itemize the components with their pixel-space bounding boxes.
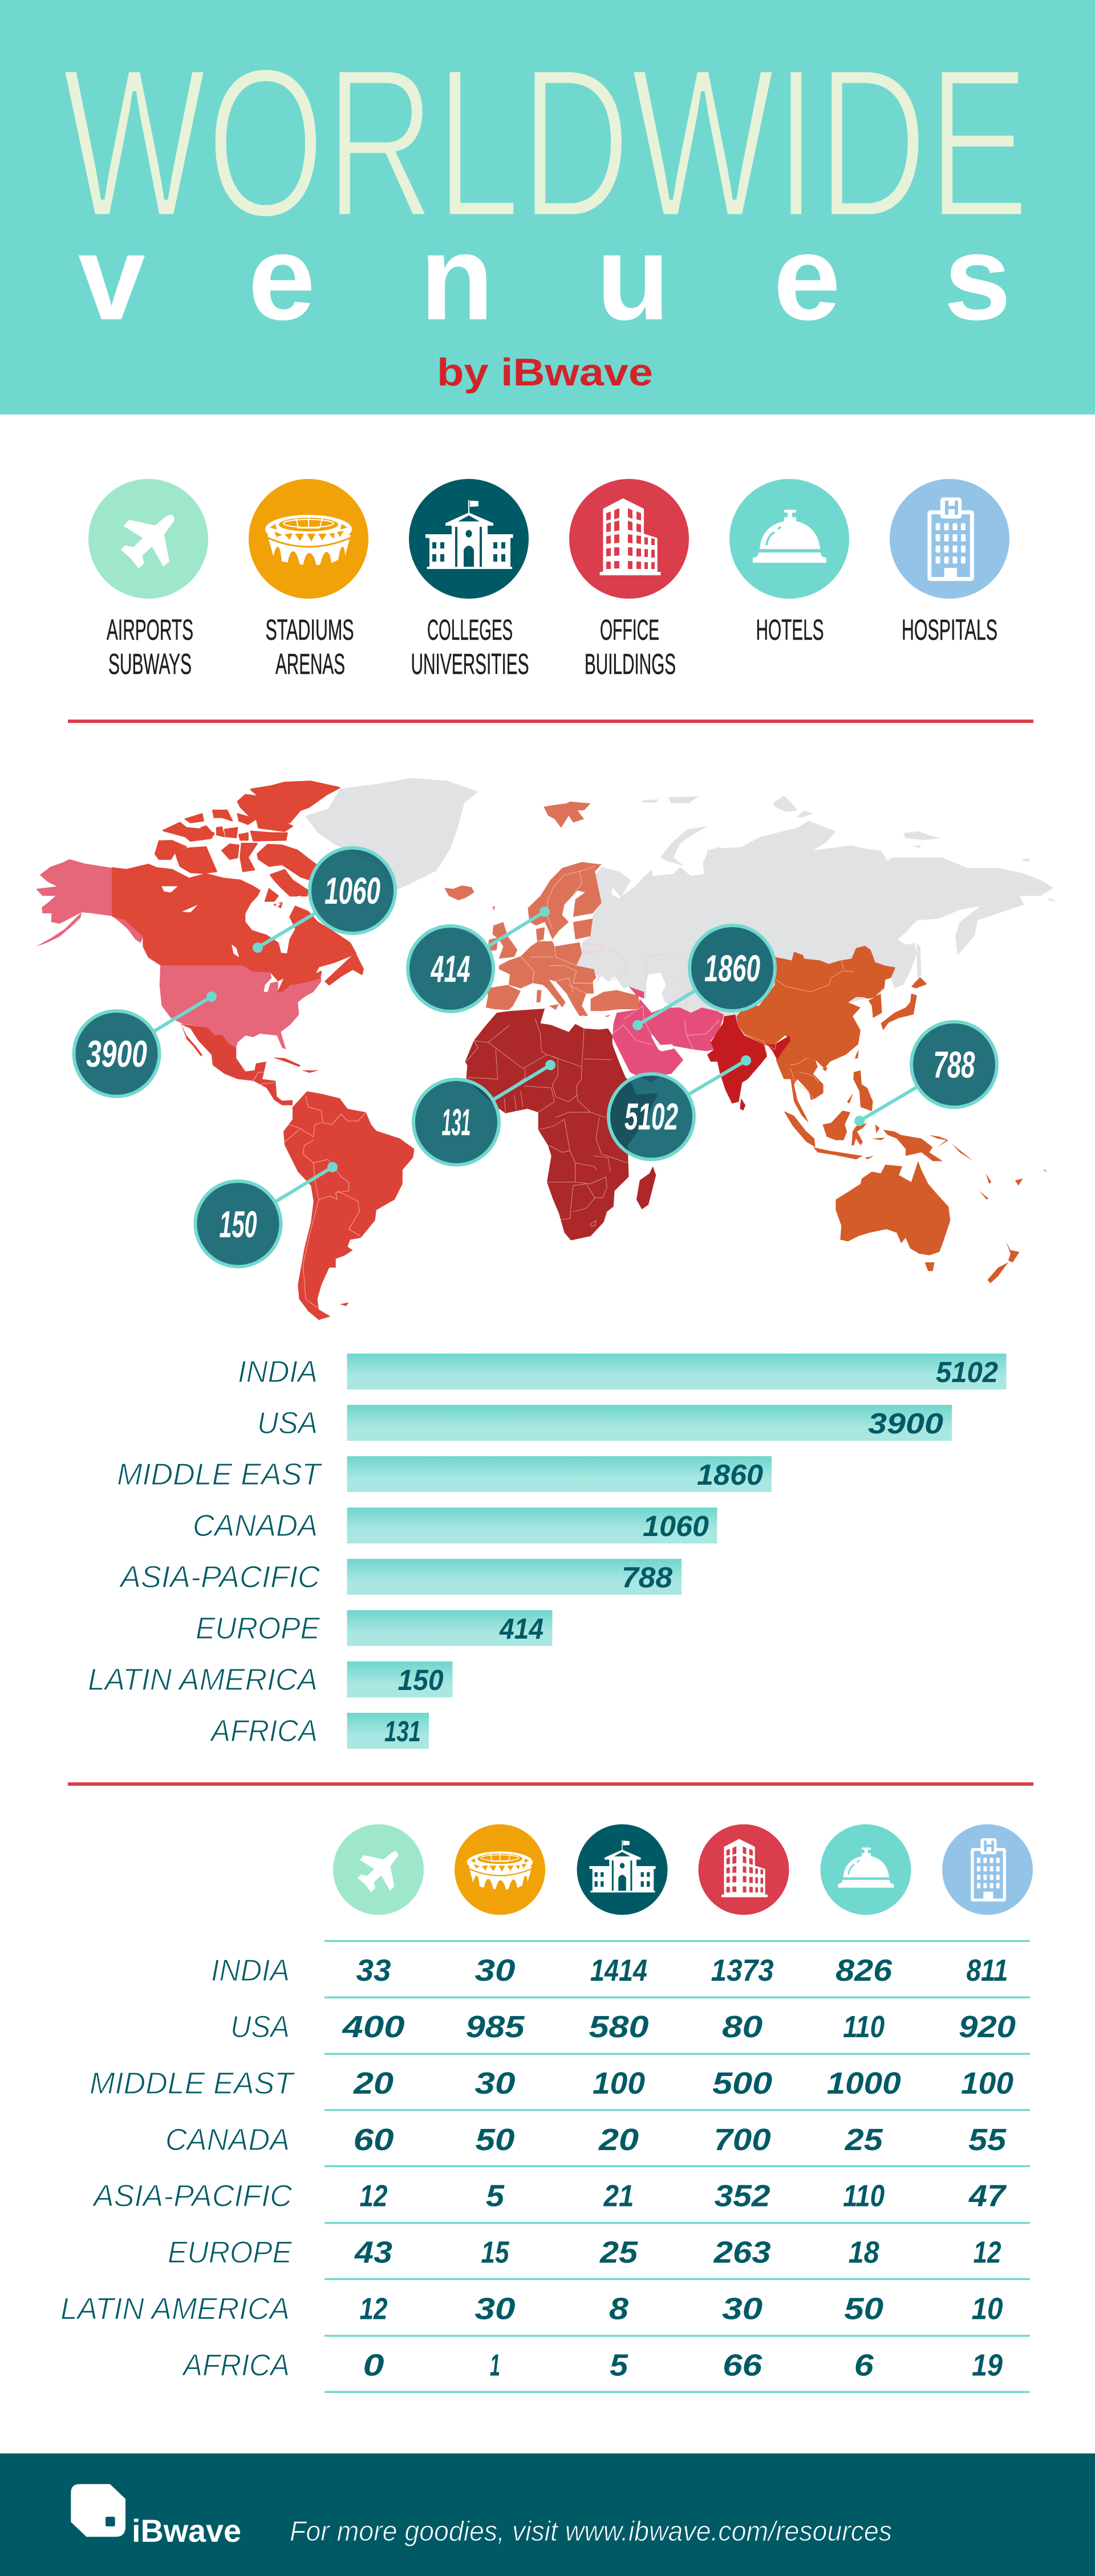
table row: Asia-Pacific: 352 [715,2179,770,2213]
table row: Asia-Pacific: 12 [359,2179,388,2213]
legend item: airports and subways: SUBWAYS [108,648,192,680]
table row: USA: 80 [722,2010,763,2044]
bar: USA: USA [257,1406,318,1440]
map region: Asia-Pacific (orange) [736,946,1048,1283]
table row: Europe [168,2235,1001,2269]
table row: Africa: 19 [972,2348,1003,2382]
table row: Canada: 700 [714,2123,771,2157]
table row: Asia-Pacific: 110 [843,2179,885,2213]
legend item: colleges and universities: UNIVERSITIES [411,648,529,680]
legend item: hotels [729,479,849,646]
bar chart: venues by region [88,1354,1006,1749]
table row: India: 826 [836,1953,893,1988]
legend item: airports and subways [88,479,208,680]
icon: colleges [577,1825,667,1915]
table row: India: INDIA [211,1953,290,1988]
table row: Latin America: 8 [609,2291,628,2326]
callout: USA 3900 [74,1011,160,1096]
callout: Europe 414 [408,926,493,1011]
subtitle: venues: venues [78,210,1011,345]
bar: Asia-Pacific [119,1559,682,1595]
table row: Africa: 0 [363,2348,384,2382]
table row: Middle East: 30 [474,2066,516,2100]
table row: USA: 580 [589,2010,649,2044]
footer [0,2453,1095,2576]
table row: Canada: 55 [968,2123,1007,2157]
bar: USA [257,1405,952,1441]
table row: Middle East: 20 [353,2066,394,2100]
table row: Canada: 25 [845,2123,883,2157]
callout: Middle East 1860: 1860 [704,947,760,989]
legend item: stadiums and arenas [249,479,368,680]
bar: Europe: 414 [499,1612,544,1645]
legend item: colleges and universities [409,479,529,680]
callout: Asia-Pacific 788 [911,1022,997,1107]
callout: Africa 131 [413,1079,499,1165]
table row: India: 1373 [711,1953,774,1988]
bar: Asia-Pacific: 788 [622,1561,673,1594]
table row: Canada: 60 [354,2123,394,2157]
map region: USA (pink) [36,859,321,1050]
table row: USA [230,2010,1016,2044]
table row: Canada: 20 [598,2123,639,2157]
bar: Europe [196,1610,552,1646]
table: venues by type and region [60,1953,1016,2382]
world map [36,778,1057,1320]
table row: Asia-Pacific: 47 [968,2179,1007,2213]
callout: USA 3900: 3900 [86,1033,147,1075]
table row: Europe: 12 [973,2235,1001,2269]
table row: Latin America: 10 [972,2291,1003,2326]
table row: India [211,1953,1008,1988]
table row: Europe: 43 [354,2235,392,2269]
bar: Europe: EUROPE [196,1611,321,1645]
table row: USA: 985 [465,2010,525,2044]
icon: hospitals [942,1825,1033,1915]
legend item: colleges and universities: COLLEGES [427,613,513,646]
bar: India: 5102 [936,1356,998,1388]
bar: Asia-Pacific: ASIA-PACIFIC [119,1560,321,1594]
table row: Asia-Pacific: ASIA-PACIFIC [92,2179,293,2213]
map region: Middle East (magenta) [613,986,724,1083]
icon: airports [333,1825,424,1915]
legend item: office buildings: OFFICE [600,613,659,646]
table row: Latin America: 12 [359,2291,388,2326]
bar: Africa [209,1713,429,1749]
table row: Latin America: 30 [474,2291,516,2326]
callout: Europe 414: 414 [430,948,470,990]
table row: Latin America: LATIN AMERICA [60,2291,290,2326]
map region: Europe (salmon) [444,802,640,1017]
legend item: stadiums and arenas: STADIUMS [266,613,354,646]
table row: Africa: 5 [610,2348,628,2382]
table row: Canada: CANADA [165,2123,290,2157]
legend item: hotels: HOTELS [756,613,824,646]
callout: Latin America 150: 150 [219,1203,257,1245]
table row: Middle East [90,2066,1013,2100]
table row: Africa: AFRICA [181,2348,290,2382]
bar: Latin America: 150 [398,1664,444,1696]
callout: India 5102: 5102 [624,1095,678,1137]
legend item: airports and subways: AIRPORTS [107,613,193,646]
table row: Asia-Pacific: 21 [603,2179,634,2213]
table row: Asia-Pacific: 5 [486,2179,505,2213]
map region: Latin America (red) [180,1024,415,1320]
table row: Africa: 66 [723,2348,763,2382]
map region: Canada and the Arctic islands (red) [112,781,363,992]
bar: Middle East: 1860 [697,1458,763,1491]
icon: stadiums [455,1825,545,1915]
bar: India [238,1354,1006,1389]
venue type legend [88,479,1009,680]
table column icons [333,1825,1033,1915]
table row: Middle East: MIDDLE EAST [90,2066,295,2100]
table row: Europe: EUROPE [168,2235,293,2269]
byline: by iBwave: by iBwave [437,351,653,394]
bar: Canada: 1060 [643,1510,709,1542]
legend item: hospitals [890,479,1009,646]
table row: Europe: 18 [849,2235,879,2269]
icon: hotels [820,1825,911,1915]
table row: India: 33 [356,1953,391,1988]
bar: Middle East [117,1456,772,1492]
table row: Africa: 6 [854,2348,874,2382]
table row: Latin America: 50 [844,2291,883,2326]
bar: Latin America [88,1661,453,1697]
table row: Europe: 263 [713,2235,771,2269]
table row: Africa [181,2348,1003,2382]
table row: Canada [165,2123,1007,2157]
legend item: hospitals: HOSPITALS [902,613,997,646]
table row: Latin America [60,2291,1003,2326]
callout: Middle East 1860 [690,925,775,1011]
legend item: stadiums and arenas: ARENAS [275,648,345,680]
table row: USA: 920 [959,2010,1016,2044]
map region: Greenland and Russia (no data, grey) [305,778,1057,1020]
callout: Canada 1060: 1060 [325,869,380,912]
map region: India (crimson) [707,1014,790,1111]
bar: Africa: AFRICA [209,1714,318,1748]
bar: Latin America: LATIN AMERICA [88,1663,318,1697]
callout lines and dots [155,907,916,1201]
table row: Asia-Pacific [92,2179,1007,2213]
icon: offices [698,1825,789,1915]
table row: India: 811 [966,1953,1008,1988]
table row: Middle East: 100 [593,2066,645,2100]
table row: Europe: 25 [599,2235,638,2269]
bar: Canada: CANADA [193,1509,318,1543]
table row: USA: USA [230,2010,290,2044]
bar: Canada [193,1508,717,1543]
table row: Middle East: 100 [961,2066,1013,2100]
table row: Middle East: 500 [712,2066,772,2100]
header banner [0,0,1095,415]
table row: India: 30 [474,1953,516,1988]
legend item: office buildings [569,479,689,680]
table row: Europe: 15 [481,2235,509,2269]
table row: USA: 110 [843,2010,885,2044]
table row: India: 1414 [590,1953,647,1988]
table row: Africa: 1 [490,2348,500,2382]
bar: USA: 3900 [868,1407,943,1440]
footer link text: For more goodies, visit www.ibwave.com/resources [290,2516,892,2547]
logo: iBwave wordmark: iBwave [132,2513,241,2549]
bar: Middle East: MIDDLE EAST [117,1457,323,1492]
table row: Latin America: 30 [722,2291,763,2326]
legend item: office buildings: BUILDINGS [585,648,676,680]
map region: Africa (dark red) [465,1009,658,1240]
callout: Asia-Pacific 788: 788 [933,1043,975,1086]
callout: Latin America 150 [195,1181,281,1267]
bar: India: INDIA [238,1355,318,1389]
bar: Africa: 131 [384,1715,421,1748]
table row: Canada: 50 [476,2123,514,2157]
table row: Middle East: 1000 [827,2066,901,2100]
callout: India 5102 [609,1074,694,1160]
callout: Africa 131: 131 [441,1101,471,1143]
table row: USA: 400 [342,2010,405,2044]
logo: iBwave mark [71,2484,125,2537]
callout: Canada 1060 [310,848,395,933]
